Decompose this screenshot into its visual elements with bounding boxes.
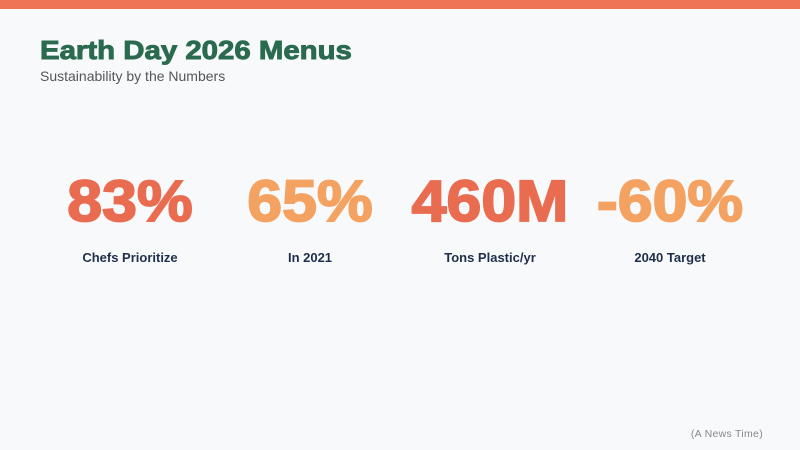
stat: 65%: 65%: [247, 169, 373, 234]
stat: 83%: 83%: [67, 169, 193, 234]
title: Earth Day 2026 Menus: [40, 35, 352, 65]
source: (A News Time): [691, 428, 763, 440]
stat: 460M: [412, 169, 568, 265]
stat: 460M: Tons Plastic/yr: [444, 250, 536, 265]
stat: 83%: [67, 169, 193, 265]
stat: 460M: 460M: [412, 169, 568, 234]
stat: -60%: -60%: [597, 169, 743, 234]
stat: -60%: [597, 169, 743, 265]
stat: -60%: 2040 Target: [634, 250, 706, 265]
subtitle: Sustainability by the Numbers: [40, 68, 225, 84]
stat: 83%: Chefs Prioritize: [82, 250, 178, 265]
top bar: [0, 0, 800, 9]
stat: 65%: [247, 169, 373, 265]
stat: 65%: In 2021: [288, 250, 332, 265]
